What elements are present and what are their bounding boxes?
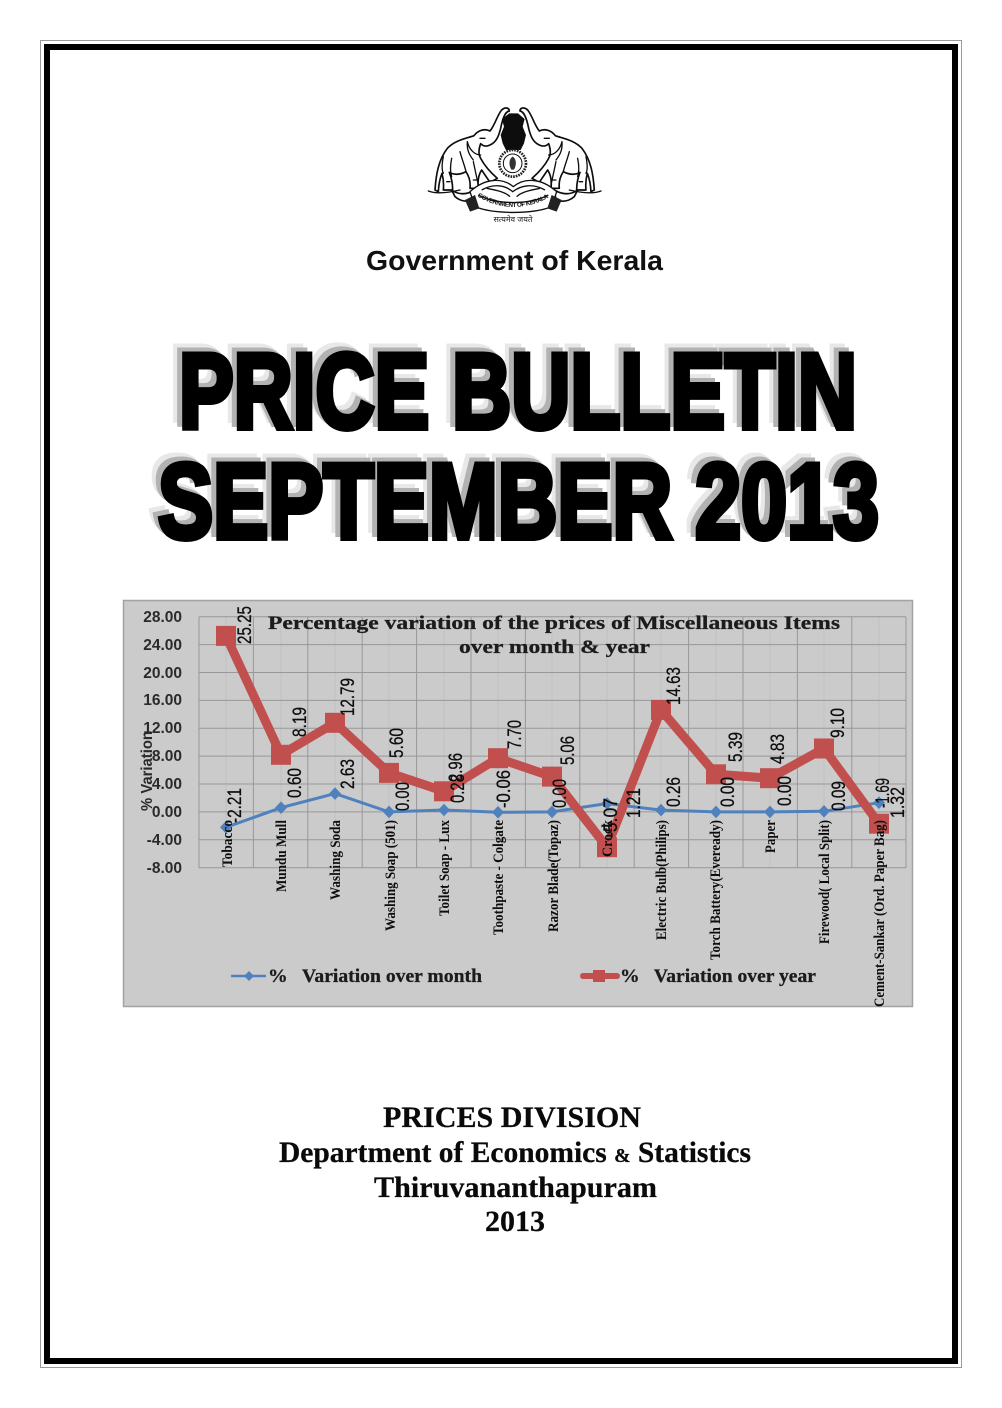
data labels: over month: 0.00 — [718, 777, 739, 807]
y axis labels: 28.00 — [143, 609, 182, 626]
heading: Government of Kerala: Government of Kerala — [366, 245, 663, 276]
icon: left elephant — [428, 108, 509, 201]
data labels: over year: 5.06 — [558, 736, 579, 765]
category labels: Paper — [763, 820, 779, 853]
data labels: over month: 0.09 — [829, 781, 850, 811]
publisher text block: PRICES DIVISION — [383, 1101, 641, 1134]
data labels: over year: -5.07 — [601, 798, 622, 838]
text: banner motto: GOVERNMENT OF KERALA — [478, 193, 548, 207]
y axis labels: 12.00 — [143, 720, 182, 737]
category labels: Torch Battery(Eveready) — [708, 820, 724, 960]
panel: line chart of percentage variation — [124, 600, 912, 1007]
icon: right elephant — [520, 108, 601, 201]
y axis title: % Variation — [139, 731, 156, 811]
y axis labels: 4.00 — [152, 776, 182, 793]
category labels: Crock — [600, 819, 616, 857]
category labels: Electric Bulb(Philips) — [654, 820, 670, 940]
category labels — [220, 819, 888, 1007]
category labels: Firewood( Local Split) — [817, 820, 833, 944]
chart title: Percentage variation of the prices of Miscellaneous Items — [268, 613, 840, 634]
data labels: over year: 14.63 — [664, 667, 685, 705]
category labels: Toothpaste - Colgate — [491, 820, 507, 935]
data labels: over month: -0.06 — [494, 770, 515, 808]
category labels: Toilet Soap - Lux — [437, 820, 453, 916]
data labels: over year: 5.39 — [726, 732, 747, 762]
text: national motto: सत्यमेव जयते — [494, 214, 533, 224]
chart title: over month & year — [459, 637, 651, 658]
y axis labels: 24.00 — [143, 637, 182, 654]
data labels: over year: 4.83 — [768, 734, 789, 764]
data labels: over year: 25.25 — [235, 606, 256, 644]
data labels: over month: 1.21 — [624, 788, 645, 818]
data labels: over month: 0.60 — [285, 768, 306, 798]
category labels: Mundu Mull — [274, 820, 290, 892]
series: % variation over year — [216, 626, 889, 857]
category labels: Tobacco — [220, 820, 236, 867]
data labels: over year: -1.69 — [873, 778, 894, 808]
data labels: over year: 8.19 — [290, 707, 311, 737]
chart title — [268, 613, 840, 658]
y axis labels: -8.00 — [147, 860, 182, 877]
data labels: over year: 5.60 — [387, 728, 408, 758]
publisher text block — [279, 1101, 751, 1238]
publisher text block: Department of Economics & Statistics — [279, 1136, 751, 1169]
y axis labels: 20.00 — [143, 665, 182, 682]
data labels: over year: 7.70 — [505, 720, 526, 749]
y axis labels: 8.00 — [152, 748, 182, 765]
data labels: over month: 0.00 — [393, 782, 414, 811]
data labels: over month: 0.26 — [664, 777, 685, 807]
icon: conch medallion — [499, 150, 526, 177]
data labels: over year: 12.79 — [338, 678, 359, 716]
y axis labels: 0.00 — [152, 804, 182, 821]
legend: over year: % Variation over year — [620, 966, 817, 987]
y axis labels: 16.00 — [143, 692, 182, 709]
legend: over month: % Variation over month — [268, 966, 482, 987]
data labels: over year: 9.10 — [828, 708, 849, 738]
y axis labels: -4.00 — [147, 832, 182, 849]
category labels: Washing Soap (501) — [383, 820, 399, 931]
data labels: over year — [235, 606, 894, 838]
emblem: Government of Kerala coat of arms — [428, 107, 602, 224]
data labels: over month: 1.32 — [888, 787, 909, 818]
category labels: Razor Blade(Topaz) — [546, 820, 562, 932]
data labels: over month — [225, 759, 909, 823]
data labels: over month: 0.00 — [550, 779, 571, 808]
icon: lion capital — [501, 113, 526, 150]
icon: scroll banner — [465, 180, 562, 214]
data labels: over month: 0.00 — [775, 776, 796, 806]
data labels: over month: 2.63 — [338, 759, 359, 789]
y axis labels — [143, 609, 182, 877]
data labels: over month: -2.21 — [225, 788, 246, 823]
series: % variation over month — [220, 787, 885, 834]
category labels: Washing Soda — [328, 820, 344, 900]
category labels: Cement-Sankar (Ord. Paper Bag) — [872, 820, 888, 1007]
data labels: over year: 2.96 — [446, 753, 467, 782]
publisher text block: 2013 — [485, 1205, 545, 1238]
publisher text block: Thiruvananthapuram — [374, 1171, 657, 1204]
data labels: over month: 0.28 — [448, 774, 469, 803]
